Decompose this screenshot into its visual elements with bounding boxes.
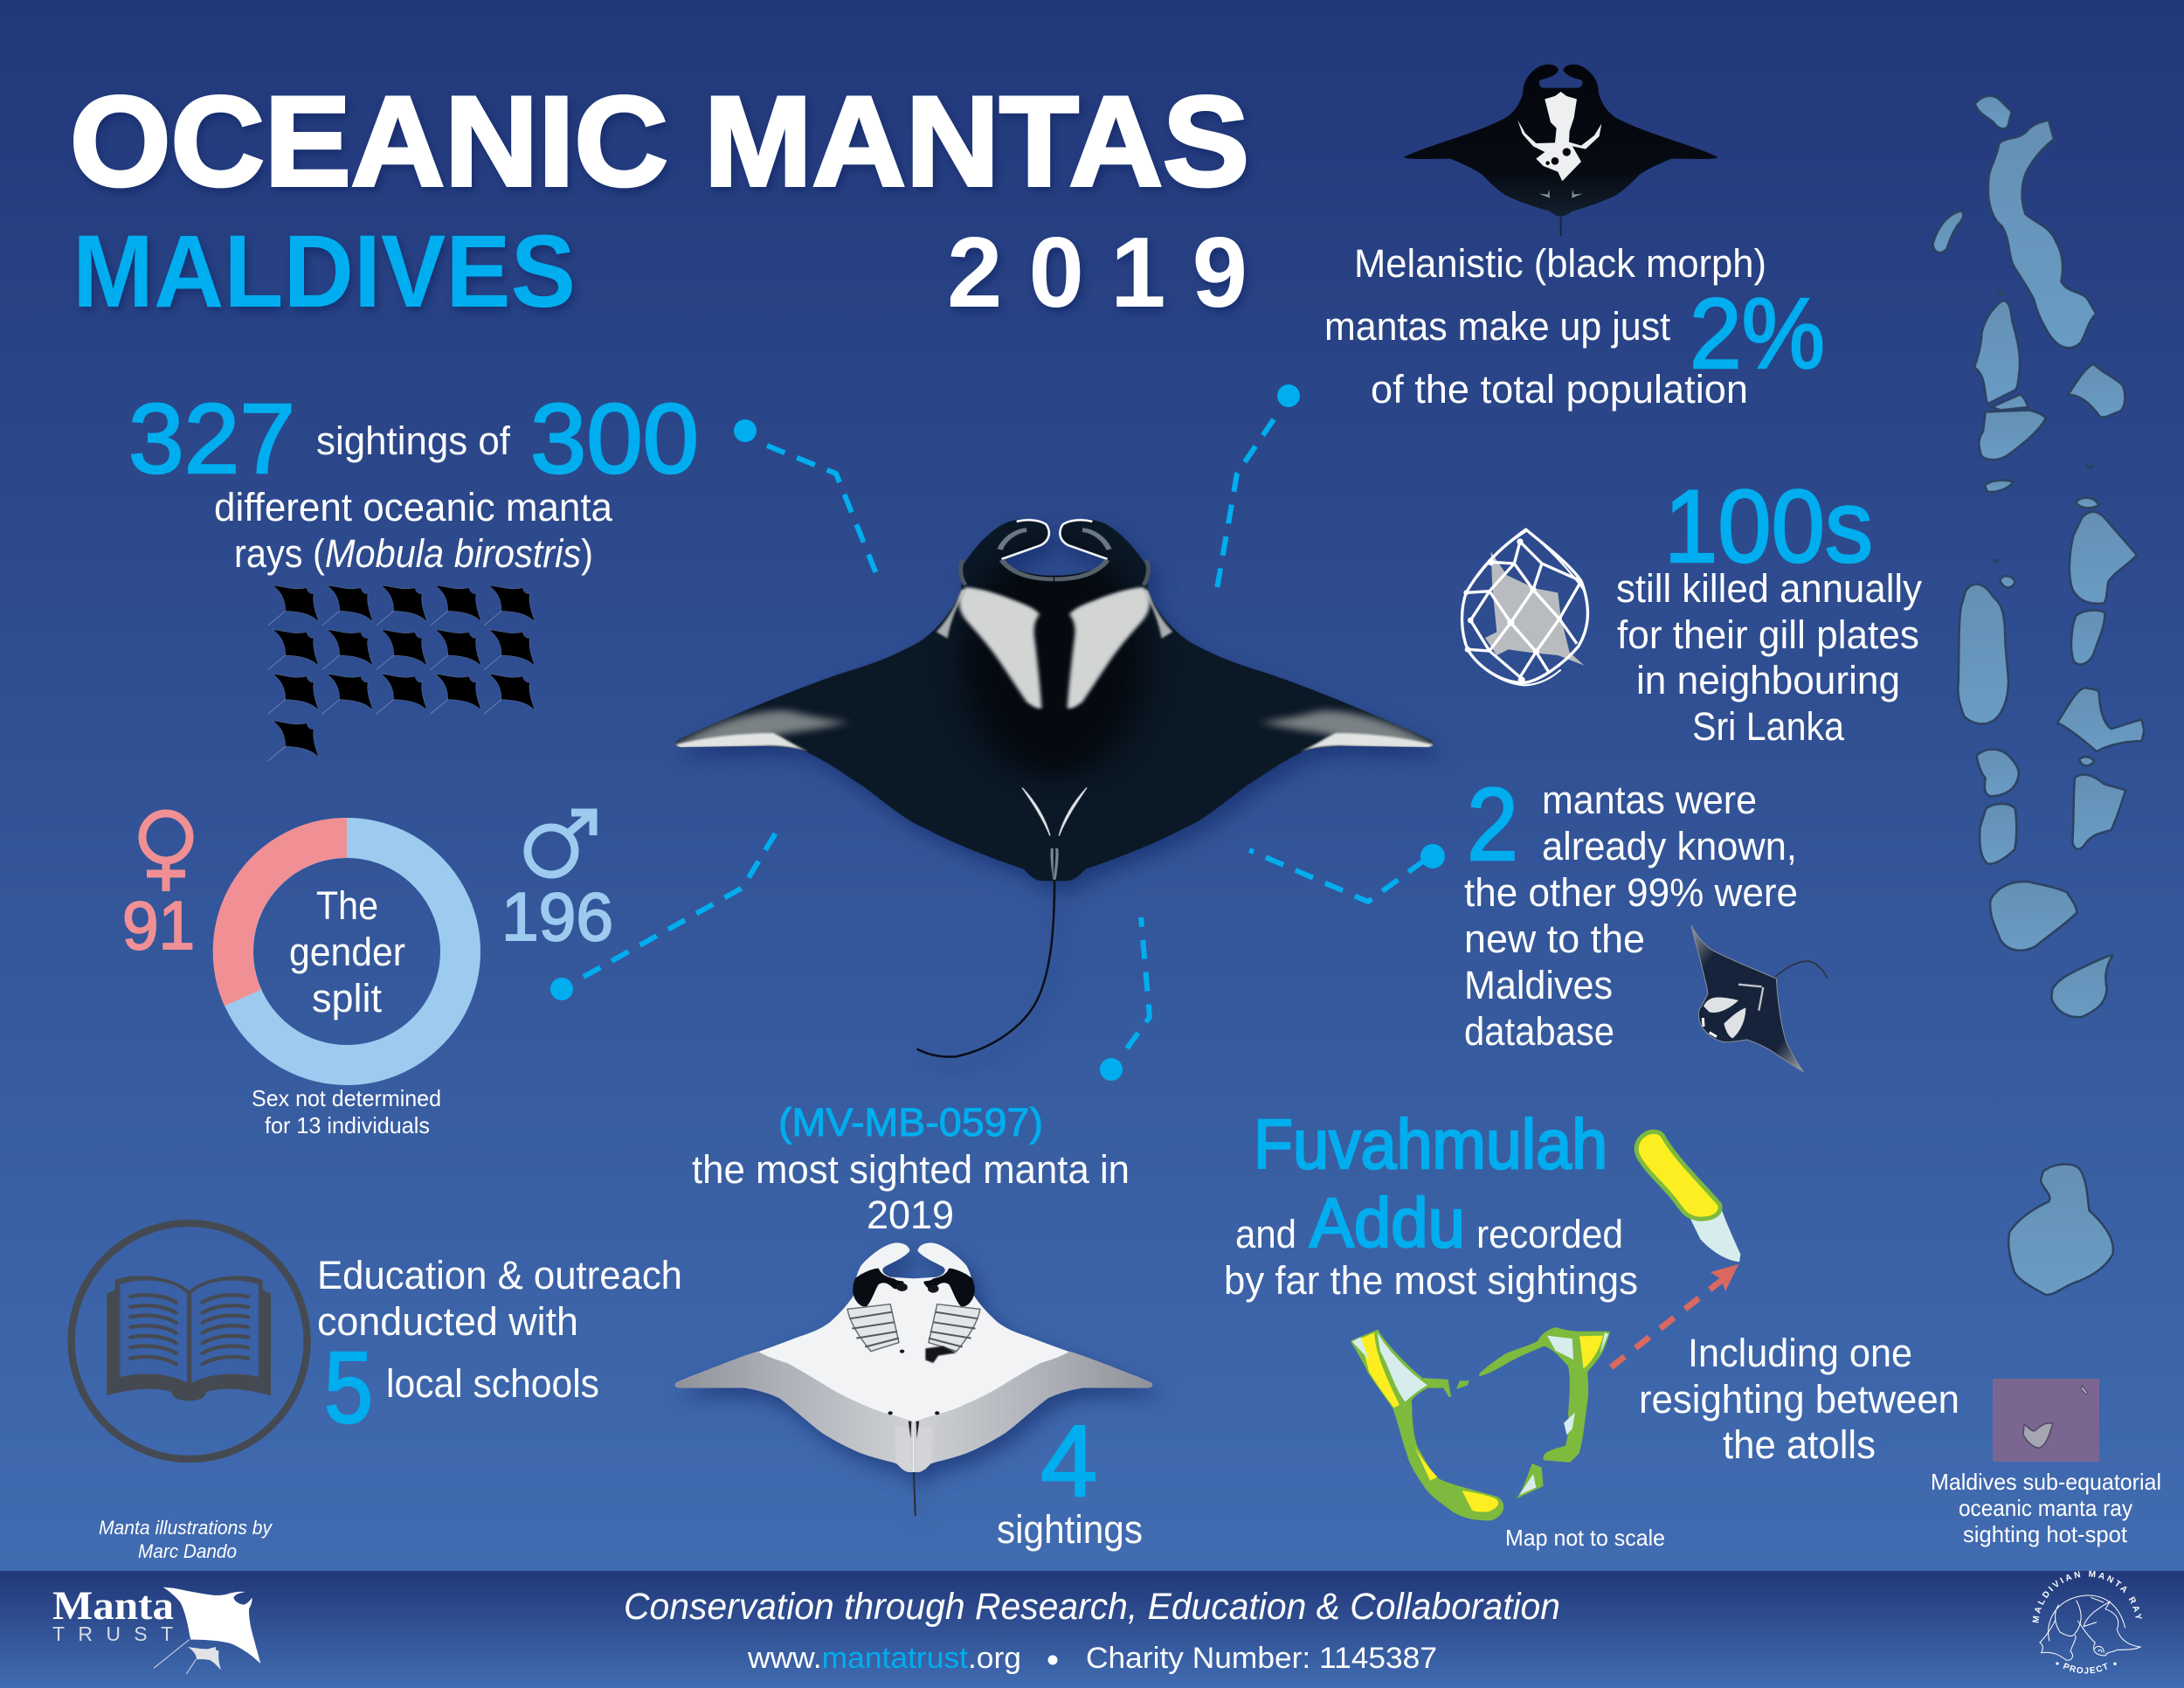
donut chart: gender split: gender — [289, 930, 405, 974]
footer contact line — [747, 1642, 1437, 1675]
donut chart: gender split — [233, 838, 460, 1065]
stat: 4 sightings: sightings — [997, 1507, 1143, 1552]
text: hot-spot caption: Maldives sub-equatorial — [1931, 1469, 2161, 1495]
female count: 91 — [122, 887, 195, 964]
text: known mantas: already known, — [1542, 824, 1797, 868]
text: melanistic stat — [1324, 241, 1825, 412]
text: hot-spot caption: oceanic manta ray — [1959, 1495, 2132, 1521]
text: resighting: the atolls — [1723, 1422, 1876, 1467]
text: melanistic stat: 2% — [1690, 279, 1825, 390]
dashed connector: gender split — [550, 826, 780, 1000]
text: melanistic stat: of the total population — [1371, 367, 1748, 412]
text: 100s killed: 100s — [1664, 469, 1873, 585]
text: most sighted manta: the most sighted manta in — [692, 1147, 1130, 1192]
text: Fuvahmulah and Addu: and — [1235, 1212, 1296, 1256]
footer band — [0, 1571, 2184, 1688]
credit: illustrations: Manta illustrations by — [99, 1517, 273, 1539]
text: Fuvahmulah and Addu: by far the most sightings — [1224, 1258, 1638, 1303]
text: education: 5 — [324, 1331, 373, 1444]
text: sightings stat: different oceanic manta — [214, 485, 613, 529]
text: hot-spot caption: sighting hot-spot — [1963, 1521, 2128, 1547]
text: education: Education & outreach — [317, 1253, 682, 1297]
text: melanistic stat: Melanistic (black morph) — [1354, 241, 1766, 286]
note: map scale: Map not to scale — [1505, 1525, 1665, 1551]
icon: manta in net — [1462, 529, 1587, 685]
credit: illustrations: Marc Dando — [138, 1540, 237, 1562]
note: sex not determined: for 13 individuals — [265, 1112, 430, 1138]
text: sightings stat: rays (Mobula birostris) — [234, 531, 593, 576]
footer logo: Manta Trust: Manta — [52, 1583, 174, 1629]
text: resighting: Including one — [1688, 1331, 1912, 1375]
text: sightings stat: 300 — [530, 384, 699, 494]
male count: 196 — [501, 878, 613, 955]
text: known mantas: the other 99% were — [1464, 870, 1798, 915]
white underside manta illustration — [675, 1242, 1152, 1516]
dashed connector: most sighted — [1100, 917, 1150, 1081]
text: known mantas: new to the — [1464, 917, 1645, 961]
text: education: conducted with — [317, 1299, 578, 1344]
text: most sighted manta: 2019 — [867, 1193, 954, 1237]
text: education: local schools — [386, 1361, 599, 1406]
footer contact line: www.mantatrust.org — [747, 1642, 1021, 1675]
small tilted manta illustration — [1691, 925, 1828, 1072]
text: 100s killed: for their gill plates — [1617, 612, 1919, 657]
footer badge: Maldivian Manta Ray Project: PROJECT — [2063, 1663, 2107, 1674]
dashed connector: new mantas — [1249, 844, 1445, 902]
text: Fuvahmulah and Addu — [1224, 1105, 1638, 1303]
text: most sighted manta: (MV-MB-0597) — [778, 1100, 1043, 1145]
map: Maldives atolls — [1932, 96, 2144, 1017]
map inset: hot-spot box — [1993, 1379, 2099, 1462]
donut chart: gender split: split — [312, 976, 382, 1020]
map: Fuvahmulah atoll — [1636, 1131, 1740, 1262]
footer logo: Manta Trust — [52, 1583, 260, 1674]
text: Fuvahmulah and Addu: Addu — [1310, 1184, 1465, 1262]
map: Addu atoll — [1352, 1329, 1608, 1519]
text: education — [317, 1253, 682, 1444]
subtitle: Maldives: MALDIVES — [73, 214, 576, 329]
text: known mantas: mantas were — [1542, 778, 1757, 822]
text: resighting — [1639, 1331, 1959, 1467]
pictogram: 16 mantas — [268, 585, 535, 761]
credit: illustrations — [99, 1517, 273, 1562]
central manta illustration — [670, 519, 1439, 1057]
text: 100s killed: Sri Lanka — [1692, 704, 1845, 749]
text: sightings stat: 327 — [128, 384, 295, 494]
footer badge: Maldivian Manta Ray Project: MALDIVIAN MANTA RAY — [2032, 1571, 2142, 1623]
footer tagline: Conservation through Research, Education & Collaboration — [624, 1586, 1560, 1628]
text: 100s killed: in neighbouring — [1636, 658, 1900, 702]
text: melanistic stat: mantas make up just — [1324, 304, 1670, 349]
year: 2019 — [947, 218, 1248, 329]
text: Fuvahmulah and Addu: Fuvahmulah — [1254, 1105, 1607, 1183]
note: sex not determined — [252, 1085, 441, 1138]
stat: 4 sightings: 4 — [1040, 1404, 1097, 1518]
text: 100s killed — [1616, 469, 1922, 749]
text: sightings stat: sightings of — [316, 419, 510, 463]
footer logo: Manta Trust: TRUST — [52, 1622, 173, 1645]
text: Fuvahmulah and Addu: recorded — [1476, 1212, 1623, 1256]
text: most sighted manta — [692, 1100, 1130, 1237]
map: southern atoll — [2008, 1165, 2113, 1295]
footer contact line: Charity Number: 1145387 — [1086, 1642, 1437, 1675]
text: known mantas: 2 — [1467, 767, 1518, 882]
footer badge: Maldivian Manta Ray Project — [2032, 1571, 2142, 1674]
text: known mantas: database — [1464, 1009, 1614, 1054]
icon: book in circle — [72, 1223, 308, 1459]
text: sightings stat — [128, 384, 699, 576]
melanistic manta illustration — [1404, 65, 1718, 236]
note: sex not determined: Sex not determined — [252, 1085, 441, 1111]
arrow: resighting between atolls — [1611, 1264, 1738, 1367]
text: known mantas: Maldives — [1464, 963, 1613, 1007]
text: known mantas — [1464, 767, 1798, 1054]
female count — [122, 813, 195, 964]
text: 100s killed: still killed annually — [1616, 566, 1922, 611]
text: hot-spot caption — [1931, 1469, 2161, 1547]
text: resighting: resighting between — [1639, 1377, 1959, 1422]
title: OCEANIC MANTAS — [70, 70, 1249, 212]
stat: 4 sightings — [997, 1404, 1143, 1552]
dashed connector: melanistic — [1216, 384, 1300, 594]
donut chart: gender split: The — [316, 883, 378, 928]
male count — [501, 813, 613, 955]
dashed connector: sightings — [734, 419, 879, 580]
